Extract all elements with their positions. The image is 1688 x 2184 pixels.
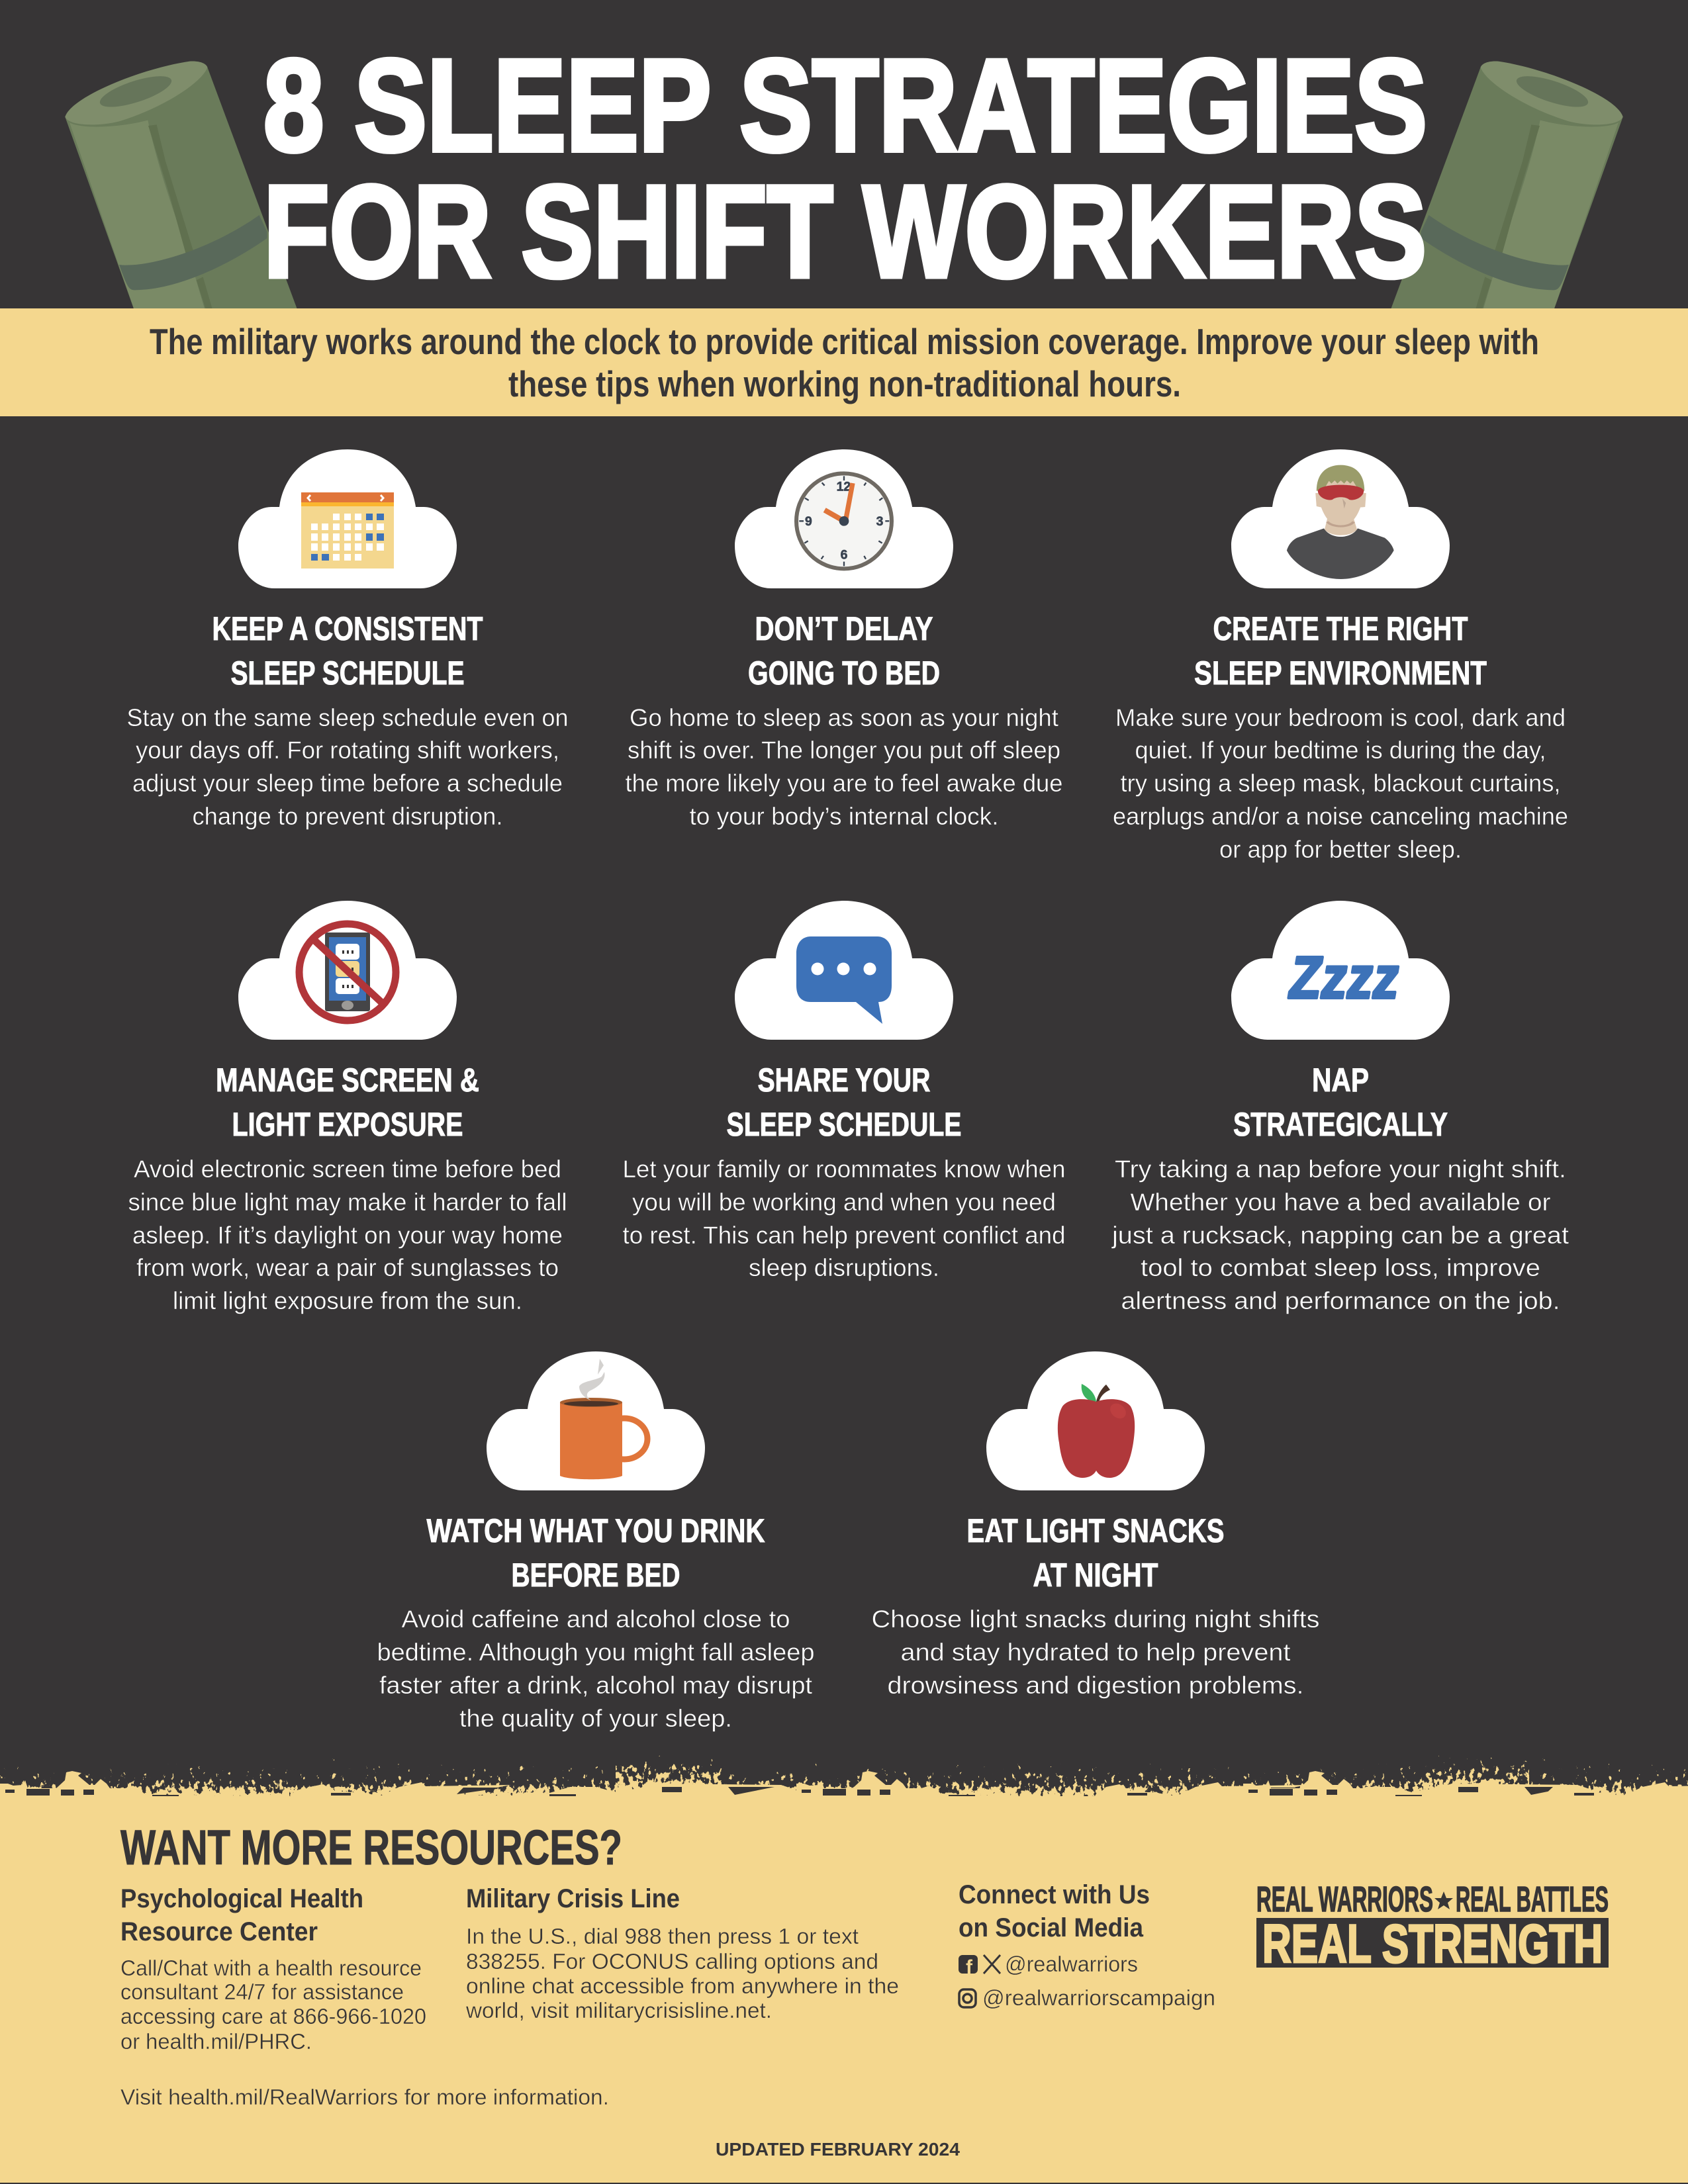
- body text: Stay on the same sleep schedule even on: [127, 704, 568, 731]
- text block: psychological health resource center: [120, 1884, 426, 2054]
- heading: GOING TO BED: [748, 655, 940, 692]
- icon: calendar in cloud: [238, 449, 457, 588]
- heading: WATCH WHAT YOU DRINK: [426, 1512, 765, 1549]
- body text: [622, 1156, 1066, 1281]
- body text: Whether you have a bed available or: [1131, 1189, 1550, 1216]
- panel: eat light snacks at night: [871, 1351, 1320, 1699]
- body text: earplugs and/or a noise canceling machine: [1113, 803, 1568, 830]
- body text: just a rucksack, napping can be a great: [1111, 1222, 1570, 1249]
- body text: Go home to sleep as soon as your night: [630, 704, 1059, 731]
- heading: [966, 1512, 1225, 1594]
- title: 8 SLEEP STRATEGIES: [263, 32, 1427, 179]
- heading: [212, 610, 483, 692]
- icon: clock in cloud: 6: [841, 548, 848, 562]
- panel: share your sleep schedule: [622, 901, 1066, 1281]
- text block: psychological health resource center: Resource Center: [120, 1917, 318, 1946]
- text block: psychological health resource center: Call/Chat with a health resource: [120, 1956, 422, 1980]
- icon: clock in cloud: [735, 449, 953, 588]
- text block: connect with us on social media: @realwarriors: [1005, 1952, 1138, 1976]
- text block: military crisis line: world, visit militarycrisisline.net.: [465, 1998, 772, 2023]
- body text: [377, 1606, 814, 1732]
- heading: DON’T DELAY: [755, 610, 933, 647]
- text block: psychological health resource center: or health.mil/PHRC.: [120, 2029, 312, 2054]
- icon: coffee mug in cloud: [487, 1351, 705, 1490]
- icon: facebook: [959, 1955, 978, 1978]
- intro band: these tips when working non-traditional hours.: [508, 363, 1181, 404]
- panel: nap strategically: [1111, 901, 1570, 1314]
- body text: Avoid electronic screen time before bed: [134, 1156, 561, 1183]
- icon: Zzzz in cloud: Zzzz: [1288, 945, 1399, 1011]
- heading: [216, 1062, 479, 1143]
- heading: [748, 610, 940, 692]
- title: [263, 32, 1427, 304]
- body text: tool to combat sleep loss, improve: [1141, 1254, 1540, 1281]
- body text: try using a sleep mask, blackout curtains,: [1120, 770, 1561, 797]
- heading: NAP: [1312, 1062, 1369, 1099]
- text: updated date: UPDATED FEBRUARY 2024: [716, 2139, 960, 2160]
- heading: LIGHT EXPOSURE: [232, 1106, 463, 1143]
- heading: CREATE THE RIGHT: [1213, 610, 1468, 647]
- icon: apple in cloud: [986, 1351, 1205, 1490]
- heading: [1233, 1062, 1448, 1143]
- body text: limit light exposure from the sun.: [173, 1287, 522, 1314]
- body text: the more likely you are to feel awake due: [625, 770, 1063, 797]
- body text: [127, 704, 568, 830]
- heading: EAT LIGHT SNACKS: [966, 1512, 1225, 1549]
- body text: since blue light may make it harder to fall: [128, 1189, 567, 1216]
- panel: keep a consistent sleep schedule: [127, 449, 568, 830]
- panel: manage screen and light exposure: [128, 901, 567, 1314]
- icon: crossed-out phone in cloud: [238, 901, 457, 1040]
- body text: faster after a drink, alcohol may disrupt: [379, 1672, 813, 1699]
- heading: SLEEP SCHEDULE: [230, 655, 465, 692]
- body text: asleep. If it’s daylight on your way home: [132, 1222, 563, 1249]
- heading: KEEP A CONSISTENT: [212, 610, 483, 647]
- heading: SLEEP ENVIRONMENT: [1194, 655, 1487, 692]
- icon: rolled sleeping mat right: [1390, 62, 1623, 311]
- body text: and stay hydrated to help prevent: [900, 1639, 1291, 1666]
- body text: to your body’s internal clock.: [690, 803, 998, 830]
- panel: don't delay going to bed: [625, 449, 1063, 830]
- heading: AT NIGHT: [1033, 1557, 1158, 1594]
- body text: bedtime. Although you might fall asleep: [377, 1639, 814, 1666]
- heading: [1194, 610, 1487, 692]
- body text: quiet. If your bedtime is during the day,: [1135, 737, 1546, 764]
- text block: connect with us on social media: Connect with Us: [959, 1880, 1150, 1909]
- text block: psychological health resource center: consultant 24/7 for assistance: [120, 1979, 404, 2004]
- body text: your days off. For rotating shift workers,: [136, 737, 559, 764]
- body text: alertness and performance on the job.: [1121, 1287, 1560, 1314]
- text block: psychological health resource center: Psychological Health: [120, 1884, 363, 1913]
- body text: shift is over. The longer you put off sleep: [628, 737, 1060, 764]
- icon: X: [984, 1955, 1000, 1974]
- icon: clock in cloud: 3: [876, 515, 884, 529]
- intro band: [0, 308, 1688, 416]
- body text: from work, wear a pair of sunglasses to: [136, 1254, 559, 1281]
- heading: want more resources: WANT MORE RESOURCES?: [120, 1820, 622, 1875]
- text block: military crisis line: online chat accessible from anywhere in the: [466, 1974, 899, 1998]
- body text: Try taking a nap before your night shift.: [1115, 1156, 1566, 1183]
- text block: psychological health resource center: accessing care at 866-966-1020: [120, 2004, 426, 2028]
- body text: [1111, 1156, 1570, 1314]
- heading: [426, 1512, 765, 1594]
- icon: clock in cloud: 12: [837, 480, 851, 494]
- body text: [1113, 704, 1568, 863]
- text block: connect with us on social media: @realwarriorscampaign: [982, 1985, 1215, 2010]
- body text: [871, 1606, 1320, 1699]
- title: FOR SHIFT WORKERS: [263, 158, 1427, 304]
- panel: watch what you drink before bed: [377, 1351, 814, 1732]
- heading: STRATEGICALLY: [1233, 1106, 1448, 1143]
- text: visit link: Visit health.mil/RealWarriors for more information.: [120, 2085, 609, 2109]
- body text: the quality of your sleep.: [459, 1705, 732, 1732]
- text block: military crisis line: [465, 1884, 899, 2023]
- text block: military crisis line: In the U.S., dial 988 then press 1 or text: [466, 1924, 859, 1948]
- icon: instagram: [959, 1989, 976, 2007]
- body text: Make sure your bedroom is cool, dark and: [1115, 704, 1566, 731]
- icon: clock in cloud: 9: [805, 515, 812, 529]
- body text: to rest. This can help prevent conflict and: [622, 1222, 1066, 1249]
- logo: real warriors real battles real strength: REAL WARRIORS: [1256, 1880, 1433, 1919]
- icon: Zzzz in cloud: [1231, 901, 1450, 1040]
- icon: rolled sleeping mat left: [65, 62, 298, 311]
- body text: adjust your sleep time before a schedule: [132, 770, 563, 797]
- body text: [625, 704, 1063, 830]
- text block: military crisis line: Military Crisis Line: [466, 1884, 680, 1913]
- body text: or app for better sleep.: [1219, 836, 1462, 863]
- footer panel with distressed edge: [0, 1755, 1688, 2183]
- body text: Avoid caffeine and alcohol close to: [401, 1606, 790, 1633]
- text block: connect with us on social media: on Social Media: [959, 1913, 1144, 1942]
- heading: SLEEP SCHEDULE: [727, 1106, 961, 1143]
- body text: drowsiness and digestion problems.: [887, 1672, 1304, 1699]
- body text: sleep disruptions.: [749, 1254, 939, 1281]
- heading: SHARE YOUR: [757, 1062, 931, 1099]
- panel: create the right sleep environment: [1113, 449, 1568, 863]
- icon: facebook: f: [966, 1956, 973, 1978]
- heading: MANAGE SCREEN &: [216, 1062, 479, 1099]
- body text: you will be working and when you need: [632, 1189, 1056, 1216]
- icon: person with sleep mask in cloud: [1231, 449, 1450, 588]
- icon: speech bubble in cloud: [735, 901, 953, 1040]
- body text: Choose light snacks during night shifts: [871, 1606, 1320, 1633]
- body text: Let your family or roommates know when: [622, 1156, 1066, 1183]
- heading: BEFORE BED: [511, 1557, 680, 1594]
- body text: change to prevent disruption.: [192, 803, 503, 830]
- text block: connect with us on social media: [959, 1880, 1215, 2010]
- heading: [727, 1062, 961, 1143]
- logo: real warriors real battles real strength: [1256, 1880, 1609, 1974]
- body text: [128, 1156, 567, 1314]
- text block: military crisis line: 838255. For OCONUS calling options and: [466, 1949, 878, 1974]
